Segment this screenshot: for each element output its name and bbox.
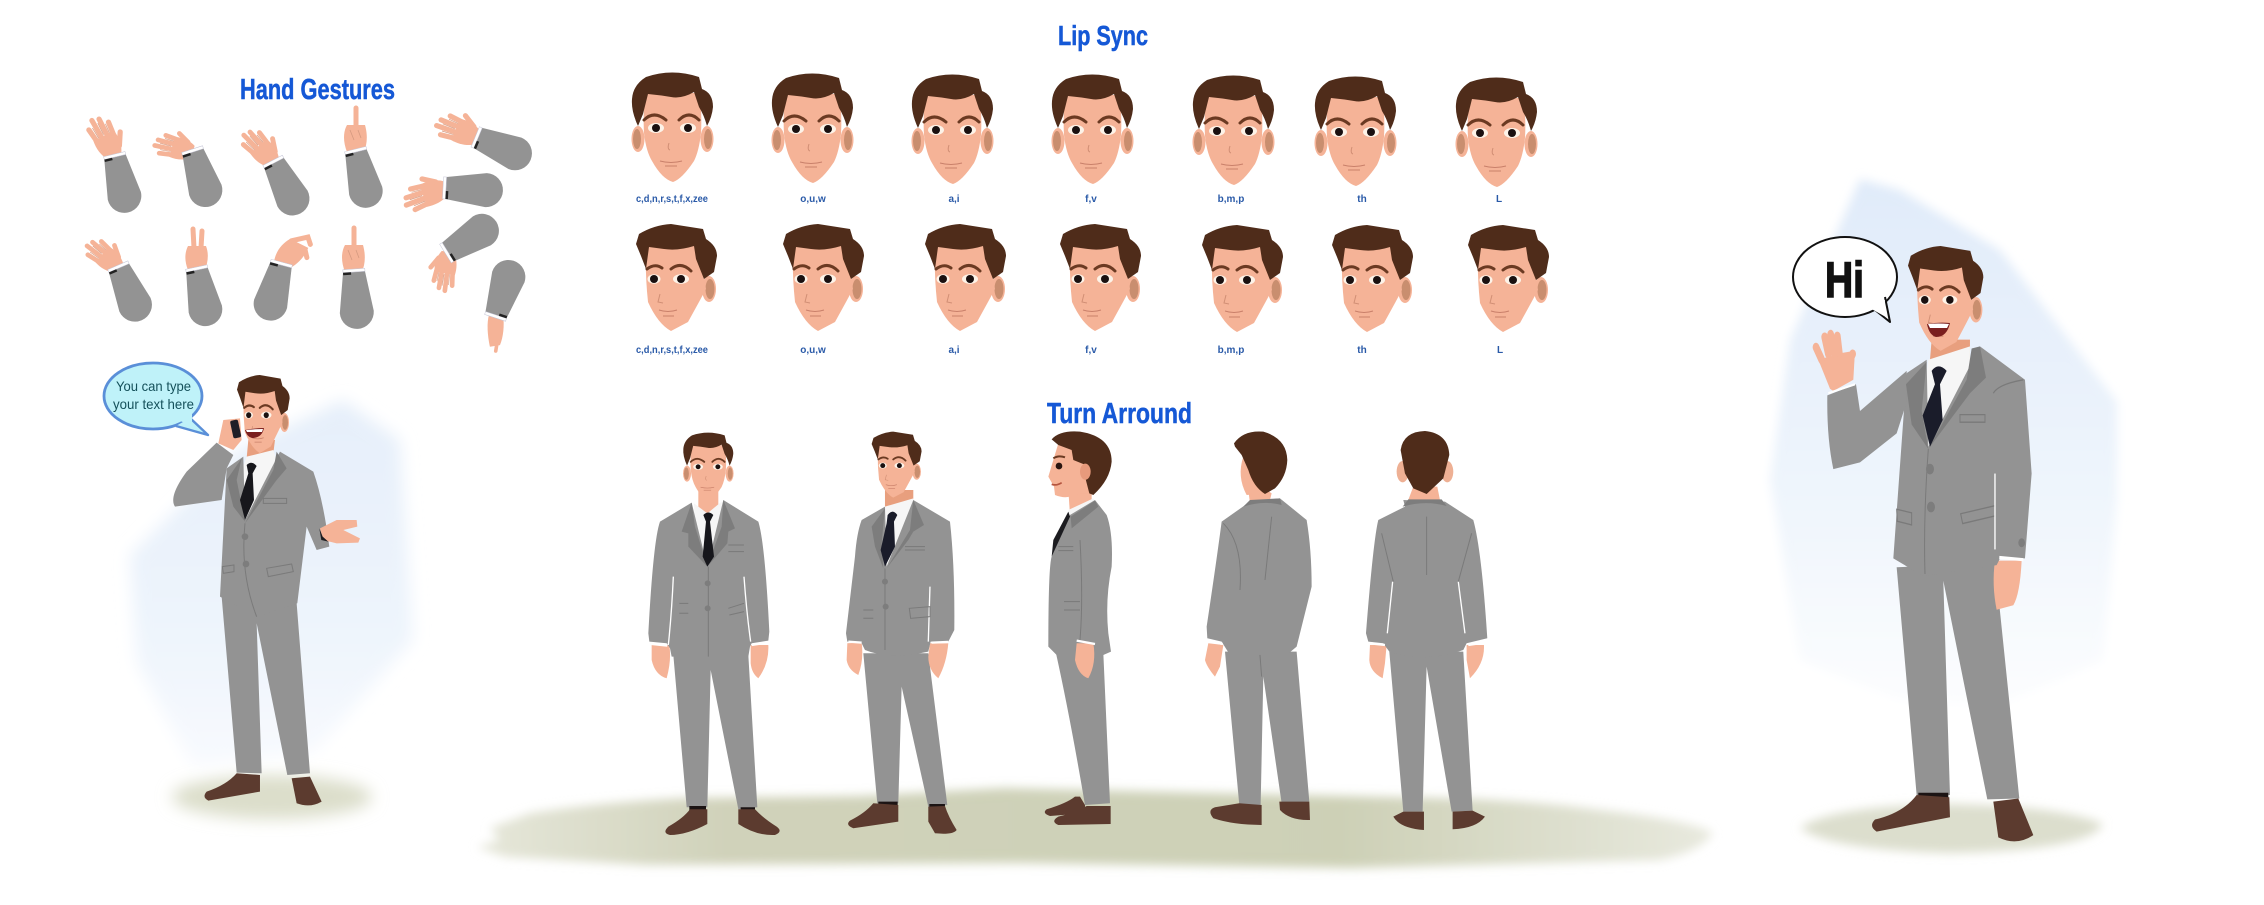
gesture: relaxed hand <box>82 232 157 327</box>
captions: front row: th <box>1357 194 1367 205</box>
captions: front row <box>636 194 1502 205</box>
heading: Turn Arround: Turn Arround <box>1047 398 1192 430</box>
speech bubble: you can type your text here <box>104 363 208 435</box>
captions: front row: b,m,p <box>1218 194 1244 205</box>
gesture: index finger up <box>337 228 375 330</box>
gesture: open hand raised <box>84 111 145 216</box>
gesture: two fingers up <box>180 229 225 329</box>
gesture: flat palm left <box>153 128 227 211</box>
body: suit <box>1816 334 2033 841</box>
figure: turnaround side <box>1045 431 1112 825</box>
speech bubble: you can type your text here: your text here <box>113 396 194 412</box>
captions: three-quarter row: a,i <box>948 345 960 356</box>
gesture: hanging hand <box>479 256 530 351</box>
captions: three-quarter row: L <box>1497 345 1503 356</box>
ground shadow: turnaround <box>477 788 1713 868</box>
gesture: open palm thumb up <box>238 122 315 221</box>
ground shadow: left figure <box>172 775 372 819</box>
panel: lip sync three-quarter faces <box>636 224 1549 332</box>
captions: front row: o,u,w <box>800 194 826 205</box>
figure: turnaround back <box>1366 431 1487 830</box>
gesture: palm facing down <box>427 207 505 292</box>
panel: hand gestures <box>82 107 537 351</box>
ground shadow: right figure <box>1800 804 2103 853</box>
figure: turnaround three-quarter <box>846 432 957 834</box>
head: talking <box>237 375 290 453</box>
captions: three-quarter row: o,u,w <box>800 345 826 356</box>
captions: front row: c,d,n,r,s,t,f,x,zee <box>636 194 708 205</box>
speech bubble: Hi: Hi <box>1825 252 1864 308</box>
figure: talking on phone <box>104 363 360 805</box>
heading: Lip Sync: Lip Sync <box>1058 20 1148 51</box>
captions: three-quarter row: f,v <box>1085 345 1097 356</box>
captions: front row: f,v <box>1085 194 1097 205</box>
captions: three-quarter row <box>636 345 1503 356</box>
captions: front row: L <box>1496 194 1502 205</box>
speech bubble: you can type your text here: You can type <box>116 378 191 394</box>
watercolor wash: left figure <box>130 400 413 767</box>
captions: three-quarter row: th <box>1357 345 1367 356</box>
watercolor wash: right figure <box>1770 179 2117 705</box>
gesture: curled hand <box>250 227 316 324</box>
figure: turnaround front <box>648 433 780 835</box>
panel: lip sync front faces <box>632 72 1538 187</box>
gesture: offering palm <box>434 107 537 176</box>
captions: front row: a,i <box>948 194 960 205</box>
heading: Hand Gestures: Hand Gestures <box>240 74 395 106</box>
body: suit <box>173 418 360 805</box>
gesture: pointing up <box>339 108 386 211</box>
figure: waving Hi <box>1793 237 2033 841</box>
gesture: extended palm <box>400 171 504 213</box>
head: smiling <box>1908 246 1983 351</box>
speech bubble: Hi <box>1793 237 1897 322</box>
captions: three-quarter row: b,m,p <box>1218 345 1244 356</box>
captions: three-quarter row: c,d,n,r,s,t,f,x,zee <box>636 345 708 356</box>
figure: turnaround three-quarter back <box>1205 431 1312 825</box>
